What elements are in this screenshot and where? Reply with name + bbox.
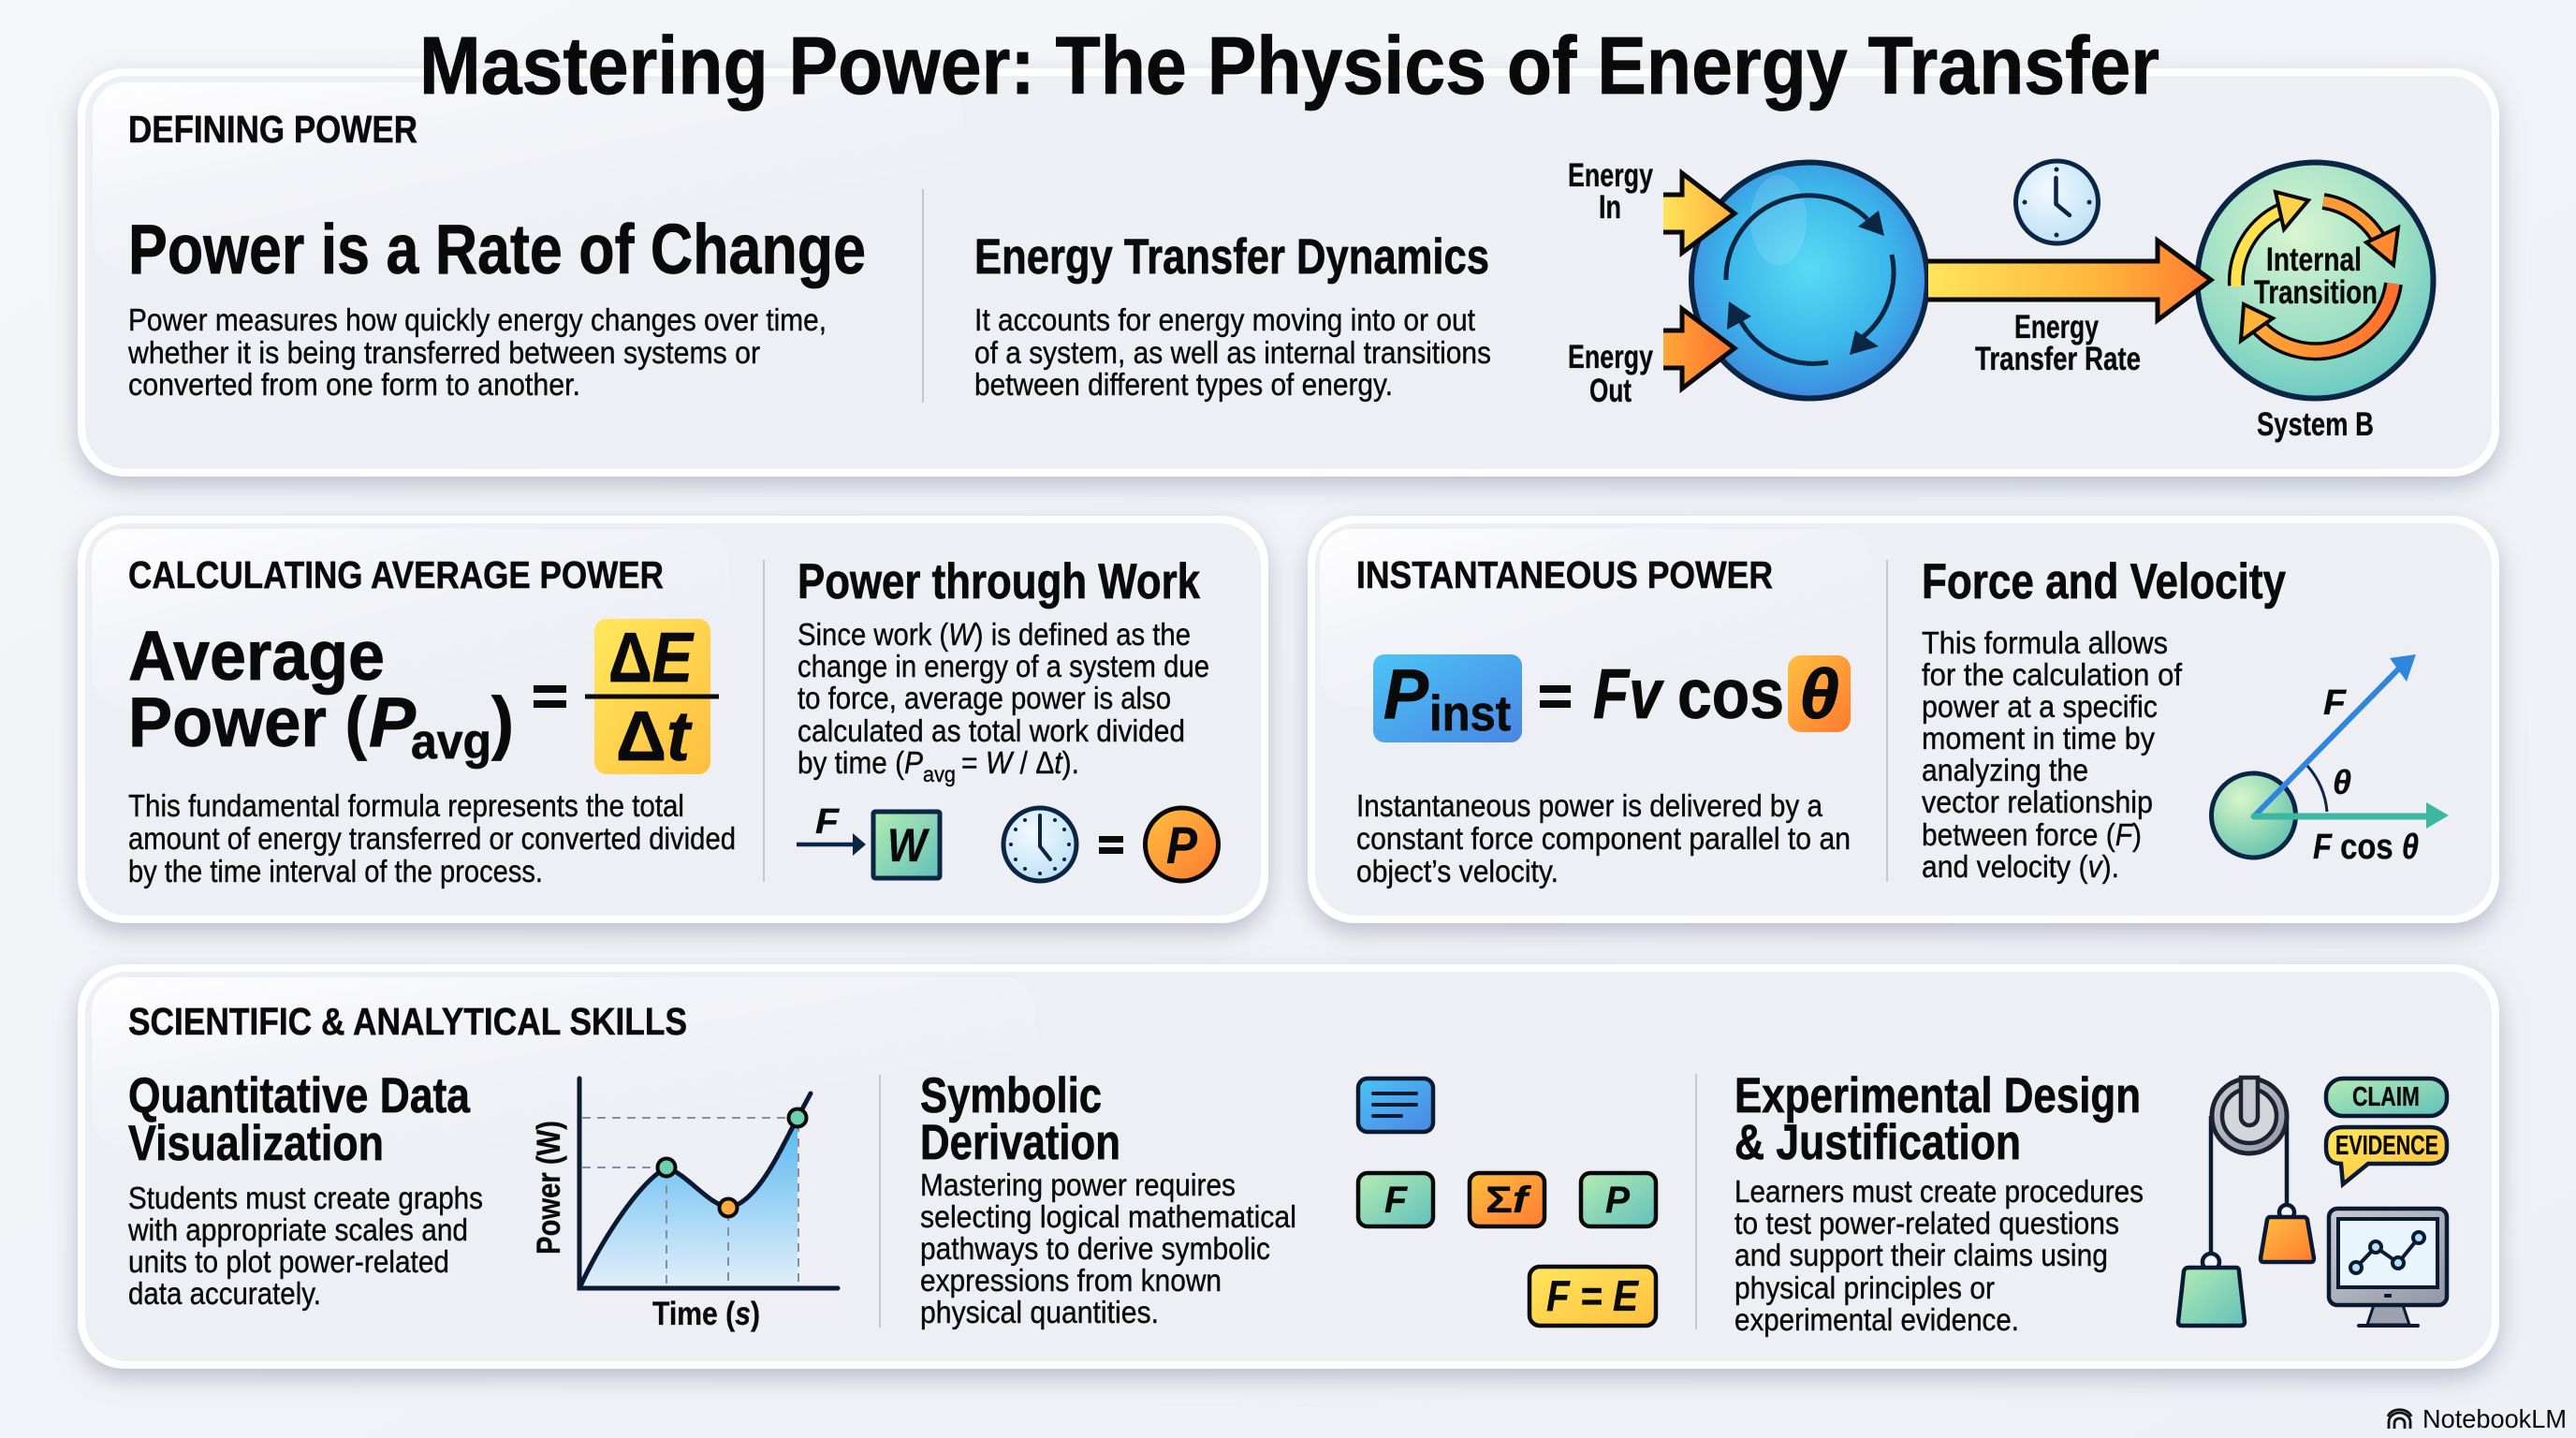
text block: instantaneous description: constant force component parallel to an	[1356, 822, 1851, 857]
text block: power through work: avg	[923, 762, 956, 786]
chart: power vs time	[531, 1078, 838, 1332]
subheading: symbolic derivation: Derivation	[920, 1115, 1120, 1170]
icon: force on work block	[797, 802, 940, 878]
subheading: power through work: Power through Work	[798, 554, 1200, 609]
card: sum f: Σf	[1486, 1180, 1531, 1221]
icon: monitor with line chart	[2329, 1209, 2447, 1326]
icon: text card	[1358, 1078, 1433, 1132]
label: energy transfer rate: Transfer Rate	[1975, 341, 2141, 377]
label: energy in: In	[1599, 189, 1621, 226]
card: F	[1358, 1173, 1433, 1226]
title: Mastering Power: The Physics of Energy Transfer	[419, 21, 2159, 111]
subheading: quantitative data visualization: Quantitative Data	[128, 1068, 470, 1123]
text block: formula description: This fundamental formula represents the total	[128, 789, 684, 824]
text block: formula description	[128, 789, 736, 889]
text block: power through work: = W / Δt).	[961, 746, 1079, 781]
label: energy out	[1568, 339, 1653, 409]
text block: quantitative data: data accurately.	[128, 1277, 321, 1312]
text block: power through work: by time (	[798, 746, 904, 781]
diagram: force vector components	[2211, 654, 2449, 867]
text block: force and velocity: analyzing the	[1922, 754, 2088, 788]
formula: average power: Δt	[616, 697, 693, 775]
text block: power through work: P	[904, 746, 924, 781]
badge: evidence	[2326, 1127, 2447, 1184]
text block: symbolic derivation: selecting logical mathematical	[920, 1200, 1296, 1235]
text block: symbolic derivation: pathways to derive symbolic	[920, 1232, 1270, 1267]
label: internal transition	[2254, 242, 2378, 311]
diagram: force vector components: θ	[2333, 763, 2351, 801]
text block: instantaneous description	[1356, 789, 1851, 889]
text block: symbolic derivation: Mastering power requires	[920, 1168, 1236, 1203]
diagram: force vector components: F	[2323, 683, 2348, 723]
badge: claim: CLAIM	[2352, 1082, 2420, 1112]
text block: experimental design: physical principles or	[1734, 1271, 1995, 1306]
icon: power circle	[1146, 808, 1219, 881]
text block: rate of change: converted from one form to another.	[128, 368, 580, 403]
heading: scientific and analytical skills: SCIENTIFIC & ANALYTICAL SKILLS	[128, 1000, 687, 1043]
text block: power through work: change in energy of a system due	[798, 650, 1209, 684]
icon: clock	[1003, 808, 1076, 881]
subheading: quantitative data visualization: Visualization	[128, 1116, 384, 1171]
panel: scientific and analytical skills	[78, 964, 2499, 1369]
text block: rate of change: whether it is being transferred between systems or	[127, 336, 760, 371]
formula: instantaneous power: Fv	[1593, 654, 1665, 733]
panel: defining power	[78, 68, 2499, 477]
arrow: energy out	[1663, 309, 1734, 389]
badge: evidence: EVIDENCE	[2335, 1131, 2438, 1161]
formula: instantaneous power: P	[1383, 654, 1429, 733]
diagram: force vector components: F cos θ	[2313, 828, 2419, 867]
chart: power vs time: Power (W)	[531, 1121, 567, 1255]
text block: force and velocity: This formula allows	[1922, 626, 2168, 661]
label: energy transfer rate: Energy	[2014, 309, 2099, 345]
arrow: energy in	[1663, 173, 1734, 253]
label: energy in	[1568, 157, 1653, 226]
icon: force on work block: W	[887, 819, 929, 872]
text block: experimental design: to test power-related questions	[1734, 1207, 2119, 1241]
icon: clock	[2016, 161, 2099, 243]
text block: symbolic derivation: physical quantities.	[920, 1296, 1159, 1330]
text block: power through work	[798, 618, 1209, 786]
formula: average power: P	[369, 682, 417, 761]
subheading: experimental design: & Justification	[1734, 1115, 2021, 1170]
text block: symbolic derivation	[920, 1168, 1296, 1330]
label: system B: System B	[2257, 406, 2374, 443]
text block: rate of change: Power measures how quickly energy changes over time,	[128, 303, 827, 338]
text block: instantaneous description: Instantaneous power is delivered by a	[1356, 789, 1822, 824]
text block: quantitative data: Students must create graphs	[128, 1181, 483, 1216]
formula: average power: Average	[128, 616, 385, 695]
label: energy out: Out	[1589, 373, 1632, 409]
arrow: energy transfer rate	[1928, 241, 2211, 320]
text block: quantitative data: units to plot power-related	[128, 1245, 449, 1280]
text block: rate of change	[127, 303, 827, 403]
heading: instantaneous power: INSTANTANEOUS POWER	[1356, 553, 1773, 596]
formula: instantaneous power: cos	[1677, 654, 1784, 733]
text block: formula description: amount of energy transferred or converted divided	[128, 822, 736, 857]
subheading: symbolic derivation: Symbolic	[920, 1068, 1102, 1123]
label: energy transfer rate	[1975, 309, 2141, 377]
subheading: force and velocity: Force and Velocity	[1922, 554, 2286, 609]
card: sum f	[1470, 1173, 1544, 1226]
icon: pulley with weights	[2178, 1078, 2314, 1326]
text block: symbolic derivation: expressions from known	[920, 1264, 1222, 1299]
text block: force and velocity: between force (F)	[1922, 818, 2142, 853]
text block: experimental design: and support their claims using	[1734, 1239, 2108, 1273]
icon: force on work block: F	[815, 802, 841, 842]
card: F: F	[1384, 1180, 1409, 1221]
diagram: energy transfer between systems	[1568, 157, 2434, 443]
text block: experimental design	[1734, 1175, 2144, 1338]
label: energy out: Energy	[1568, 339, 1653, 375]
card: F = E: F = E	[1546, 1271, 1639, 1320]
heading: defining power: DEFINING POWER	[128, 108, 417, 151]
text block: power through work: calculated as total work divided	[798, 714, 1185, 749]
panel: calculating average power	[78, 516, 1268, 923]
logo: NotebookLM: NotebookLM	[2422, 1404, 2567, 1433]
text block: formula description: by the time interval of the process.	[128, 855, 543, 889]
text block: power through work: to force, average power is also	[798, 682, 1171, 716]
text block: force and velocity: and velocity (v).	[1922, 850, 2119, 885]
sphere: system B	[2198, 163, 2434, 399]
formula: average power: )	[491, 682, 514, 761]
text block: force and velocity	[1922, 626, 2183, 885]
text block: force and velocity: vector relationship	[1922, 785, 2153, 820]
text block: instantaneous description: object’s velocity.	[1356, 855, 1559, 889]
text block: experimental design: Learners must create procedures	[1734, 1175, 2144, 1210]
formula: instantaneous power: inst	[1429, 686, 1511, 741]
card: P	[1581, 1173, 1656, 1226]
text block: force and velocity: moment in time by	[1922, 722, 2155, 756]
text block: power through work: Since work (W) is defined as the	[798, 618, 1191, 653]
icon: power circle: P	[1166, 815, 1198, 874]
subheading: quantitative data visualization	[128, 1068, 470, 1171]
text block: force and velocity: for the calculation of	[1922, 658, 2183, 693]
panel: instantaneous power	[1308, 516, 2499, 923]
subheading: rate of change: Power is a Rate of Change	[128, 210, 866, 288]
text block: quantitative data: with appropriate scales and	[127, 1213, 468, 1248]
sphere: system A	[1691, 163, 1927, 399]
text block: experimental design: experimental evidence.	[1734, 1303, 2019, 1338]
formula: average power: avg	[411, 714, 491, 770]
heading: calculating average power: CALCULATING AVERAGE POWER	[128, 553, 664, 596]
equals sign	[1099, 836, 1123, 854]
formula: average power: Power (	[128, 682, 367, 761]
subheading: experimental design: Experimental Design	[1734, 1068, 2141, 1123]
text block: energy transfer dynamics	[974, 303, 1491, 403]
badge: claim	[2326, 1078, 2447, 1116]
text block: energy transfer dynamics: It accounts for energy moving into or out	[974, 303, 1476, 338]
text block: quantitative data	[127, 1181, 483, 1312]
card: F = E	[1530, 1267, 1656, 1326]
label: energy in: Energy	[1568, 157, 1653, 194]
subheading: experimental design	[1734, 1068, 2141, 1170]
text block: energy transfer dynamics: of a system, as well as internal transitions	[974, 336, 1491, 371]
text block: energy transfer dynamics: between different types of energy.	[974, 368, 1393, 403]
formula: instantaneous power	[1373, 654, 1851, 742]
label: internal transition: Transition	[2254, 274, 2378, 311]
text block: force and velocity: power at a specific	[1922, 690, 2158, 725]
card: P: P	[1605, 1180, 1630, 1221]
formula: instantaneous power: θ	[1799, 654, 1839, 733]
formula: average power	[128, 616, 719, 775]
subheading: energy transfer dynamics: Energy Transfer Dynamics	[974, 229, 1489, 285]
formula: average power: ΔE	[608, 618, 695, 697]
label: internal transition: Internal	[2266, 242, 2362, 278]
chart: power vs time: Time (s)	[652, 1296, 760, 1332]
subheading: symbolic derivation	[920, 1068, 1120, 1170]
